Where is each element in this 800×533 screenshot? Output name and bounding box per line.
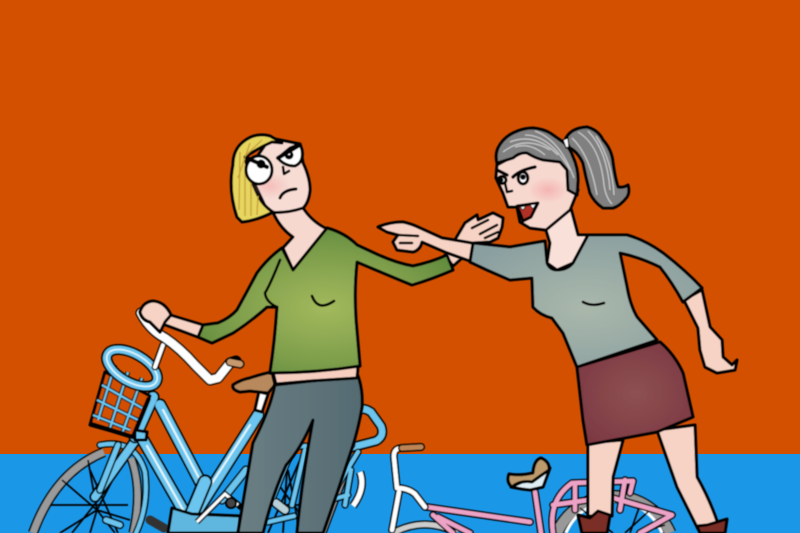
rear wheel of blue bicycle xyxy=(268,455,362,533)
left woman forearm xyxy=(163,315,203,337)
hair strokes xyxy=(238,140,262,216)
basket weave xyxy=(93,365,142,434)
left woman hand on handlebar xyxy=(140,301,171,332)
frame tubes xyxy=(135,397,258,528)
left woman hair xyxy=(231,135,282,222)
lamp bracket xyxy=(135,430,147,440)
pink frame, rack and fender xyxy=(427,480,672,533)
finger lines xyxy=(398,235,418,243)
ponytail xyxy=(565,127,629,208)
chest mark xyxy=(312,296,334,305)
hair xyxy=(496,128,578,195)
right arm xyxy=(684,290,737,373)
teeth xyxy=(520,204,536,210)
head xyxy=(248,138,310,212)
front fender and fork xyxy=(95,441,146,533)
pink bike saddle xyxy=(511,468,550,490)
left woman raised wrist xyxy=(445,246,462,266)
neck xyxy=(530,200,588,270)
left woman neck xyxy=(273,208,327,270)
basket rim xyxy=(101,342,163,394)
nose xyxy=(283,167,289,174)
front wheel of pink bicycle xyxy=(393,524,457,533)
right boot xyxy=(697,519,727,533)
pink bicycle xyxy=(392,447,672,533)
background: blue ground xyxy=(0,454,800,533)
woman with grey ponytail xyxy=(378,127,737,533)
chain case xyxy=(168,508,240,533)
nose xyxy=(505,183,512,192)
raised open hand xyxy=(455,213,503,243)
right woman left leg xyxy=(588,440,623,516)
armpit line xyxy=(265,260,280,307)
blue bicycle xyxy=(33,313,382,533)
open mouth xyxy=(517,203,538,221)
grey top xyxy=(470,235,702,367)
eyes xyxy=(498,172,528,184)
eyebrows xyxy=(497,167,535,177)
hair band xyxy=(563,138,569,148)
basket xyxy=(90,342,163,440)
mouth xyxy=(280,189,296,198)
midriff xyxy=(273,366,358,384)
handlebar xyxy=(141,313,240,380)
front wheel xyxy=(33,452,138,533)
pink bike handlebar and stem xyxy=(392,447,425,530)
saddle xyxy=(233,372,275,393)
blush xyxy=(250,173,290,199)
chest mark xyxy=(583,302,604,305)
eyebrows xyxy=(247,146,298,167)
crank and chain guard xyxy=(197,494,242,522)
right woman head xyxy=(496,150,578,230)
rear wheel of pink bicycle xyxy=(557,497,670,533)
left boot xyxy=(578,511,610,533)
green sweater xyxy=(198,228,453,373)
eyes xyxy=(246,144,302,184)
woman with blonde hair xyxy=(140,135,462,533)
right woman right leg xyxy=(657,425,718,529)
skirt xyxy=(577,342,693,445)
cheek blush xyxy=(528,177,568,203)
trousers xyxy=(238,376,362,533)
hand finger lines xyxy=(472,220,498,238)
seat post xyxy=(255,392,268,412)
rear carrier loop and stays xyxy=(268,409,382,522)
pointing arm and fist xyxy=(378,222,473,261)
